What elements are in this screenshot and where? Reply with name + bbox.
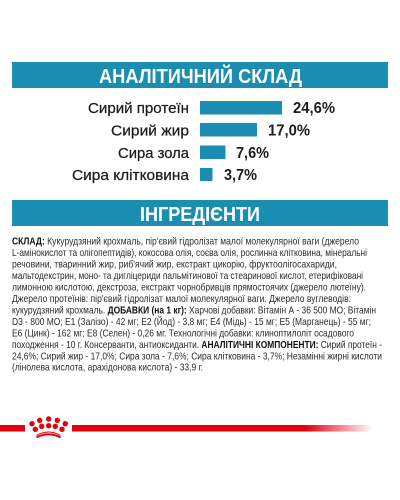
row: crude fibre	[72, 167, 257, 184]
ingredients text block: речовини, тваринний жир, риб'ячий жир, екстракт цикорію, фруктоолігосахариди,	[12, 258, 337, 270]
red footer line	[0, 425, 373, 432]
header: ingredients	[12, 200, 388, 226]
header: ingredients: ІНГРЕДІЄНТИ	[140, 204, 260, 226]
row: crude ash: 7,6%	[236, 145, 269, 162]
row: crude protein: Сирий протеїн	[88, 100, 189, 117]
row: crude fat: 17,0%	[268, 122, 310, 140]
row: crude fibre: Сира клітковина	[72, 167, 190, 184]
ingredients text block: походження - 10 г. Консерванти, антиоксиданти. АНАЛІТИЧНІ КОМПОНЕНТИ: Сирий протеїн -	[12, 340, 382, 351]
bar chart: composition	[72, 100, 335, 184]
ingredients text block: (лінолева кислота, арахідонова кислота) - 33,9 г.	[12, 362, 203, 374]
header: analytical composition	[12, 62, 388, 88]
row: crude protein	[88, 100, 335, 117]
row: crude ash	[118, 145, 269, 162]
row: crude fibre: 3,7%	[224, 167, 257, 184]
row: crude protein: 24,6%	[293, 100, 335, 117]
row: crude ash: Сира зола	[118, 145, 190, 162]
ingredients text block	[12, 236, 382, 374]
row: crude fat	[111, 122, 310, 140]
header: analytical composition: АНАЛІТИЧНИЙ СКЛАД	[99, 64, 302, 88]
row: crude fat: Сирий жир	[111, 122, 189, 140]
icon: royal crown logo	[29, 416, 68, 438]
